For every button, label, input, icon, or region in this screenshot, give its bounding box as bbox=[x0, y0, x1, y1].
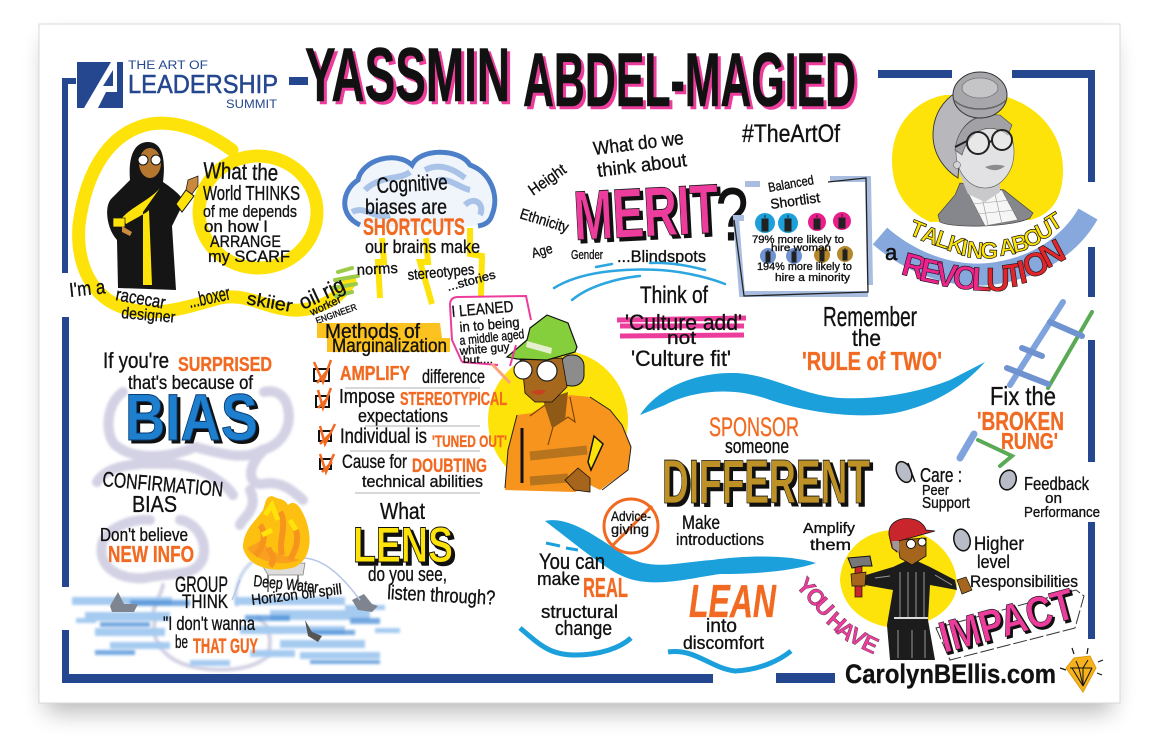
blue frame bbox=[62, 70, 1095, 683]
text: what lens: What bbox=[380, 498, 426, 524]
text: make real structural change: REAL bbox=[583, 572, 628, 603]
sponsor someone different bbox=[662, 412, 873, 520]
text: group think: be bbox=[175, 632, 188, 652]
panel: balanced shortlist: Shortlist bbox=[769, 189, 821, 212]
icon: ladder bbox=[960, 302, 1092, 466]
brain: cognitive biases: norms bbox=[356, 260, 398, 279]
text: group think: THAT GUY bbox=[193, 635, 258, 658]
icon: no advice-giving: Advice- bbox=[611, 508, 651, 524]
sponsor someone different: SPONSOR bbox=[709, 412, 799, 442]
callout: rule of two bbox=[802, 301, 942, 376]
callout: rule of two: Remember bbox=[823, 301, 917, 332]
checklist: STEREOTYPICAL bbox=[400, 389, 507, 409]
text: care peer support: Peer bbox=[922, 482, 949, 499]
panel: balanced shortlist: 194% more likely to bbox=[757, 261, 852, 273]
text: you have impact bbox=[791, 572, 1084, 665]
text: lean into discomfort: LEAN bbox=[689, 575, 777, 627]
checklist: Individual is bbox=[340, 425, 427, 448]
text: surprised bias: BIAS bbox=[128, 383, 261, 457]
text: confirmation bias: BIAS bbox=[132, 491, 177, 517]
speech: what the world thinks: ARRANGE bbox=[210, 232, 281, 251]
text: what do we think about merit: Ethnicity bbox=[518, 206, 571, 237]
text: group think: GROUP bbox=[175, 572, 228, 597]
text: what lens bbox=[353, 498, 496, 610]
panel: balanced shortlist: hire a minority bbox=[775, 272, 851, 284]
speech bubble: I leaned in: white guy bbox=[458, 340, 510, 358]
callout: fix the broken rung: 'BROKEN bbox=[977, 406, 1064, 436]
checklist: expectations bbox=[358, 406, 448, 426]
text: feedback on performance: Performance bbox=[1024, 504, 1100, 521]
text: what do we think about merit: ...Blindspots bbox=[617, 247, 706, 266]
yellow scarf swoosh bbox=[79, 123, 358, 312]
text: surprised bias: If you're bbox=[103, 348, 169, 373]
brain: cognitive biases: stereotypes bbox=[407, 261, 475, 284]
text: make introductions bbox=[676, 513, 764, 549]
callout: rule of two: 'RULE of TWO' bbox=[802, 346, 942, 376]
checklist bbox=[314, 360, 507, 493]
logo: The Art of Leadership Summit: SUMMIT bbox=[226, 97, 278, 111]
text: lean into discomfort: discomfort bbox=[683, 633, 764, 653]
icon: no advice-giving: giving bbox=[611, 521, 649, 537]
text: you have impact: IMPACT bbox=[936, 582, 1082, 665]
title: ABDEL-MAGIED bbox=[526, 41, 859, 126]
brain: cognitive biases: Cognitive bbox=[376, 169, 448, 198]
callout: rule of two: the bbox=[852, 325, 881, 351]
title: talking about a revolution bbox=[880, 207, 1088, 298]
text: care peer support bbox=[920, 465, 970, 512]
checklist: Cause for bbox=[342, 452, 408, 473]
callout: think of culture add: not bbox=[667, 328, 696, 348]
illustration: portrait of Yassmin bbox=[892, 72, 1063, 226]
callout: think of culture add: 'Culture add' bbox=[625, 310, 742, 335]
callout: fix the broken rung: Fix the bbox=[990, 381, 1056, 411]
blue river upper bbox=[640, 362, 985, 415]
checklist: 'TUNED OUT' bbox=[432, 432, 507, 451]
text: make real structural change: change bbox=[555, 618, 612, 640]
text: deep water horizon: Deep Water bbox=[253, 573, 320, 597]
title: YASSMIN bbox=[308, 36, 513, 121]
logo: The Art of Leadership Summit: THE ART OF bbox=[128, 60, 208, 72]
text: amplify them: them bbox=[810, 537, 851, 554]
text: you have impact: IMPACT bbox=[934, 580, 1080, 663]
sponsor someone different: DIFFERENT bbox=[662, 448, 870, 517]
blue strokes under blindspots bbox=[554, 263, 725, 300]
text: you have impact: YOU HAVE bbox=[791, 572, 883, 659]
text: surprised bias bbox=[103, 348, 272, 457]
panel: balanced shortlist: 79% more likely to bbox=[752, 234, 844, 246]
text: what do we think about merit: MERIT bbox=[575, 172, 724, 258]
title: talking about a revolution: a bbox=[885, 240, 898, 265]
title: talking about a revolution: TALKING ABOUT bbox=[906, 207, 1067, 264]
brain: cognitive biases: ...stories bbox=[445, 267, 497, 294]
illustration: woman in black abaya bbox=[107, 142, 198, 290]
ships bbox=[110, 592, 378, 642]
text: what lens: LENS bbox=[356, 520, 456, 576]
text: what lens: LENS bbox=[353, 517, 453, 573]
sponsor someone different: DIFFERENT bbox=[665, 451, 873, 520]
hashtag: #TheArtOf bbox=[742, 120, 840, 148]
text: confirmation bias bbox=[100, 468, 224, 567]
brain: cognitive biases: SHORTCUTS bbox=[363, 214, 465, 241]
text: career list: I'm a bbox=[68, 276, 107, 302]
text: what do we think about merit: Gender bbox=[571, 247, 603, 262]
text: make real structural change bbox=[520, 549, 631, 655]
heading: methods of marginalization: Marginalization bbox=[332, 336, 447, 357]
brain: cognitive biases: biases are bbox=[365, 196, 447, 219]
text: career list: ...boxer bbox=[186, 283, 232, 313]
sponsor someone different: someone bbox=[725, 436, 789, 458]
water: oil spill ocean bbox=[72, 597, 400, 666]
callout: fix the broken rung bbox=[977, 381, 1064, 454]
people icons bbox=[755, 212, 853, 264]
brain: cognitive biases bbox=[344, 152, 497, 304]
text: confirmation bias: CONFIRMATION bbox=[102, 468, 224, 502]
text: amplify them: Amplify bbox=[803, 520, 856, 537]
heading: methods of marginalization: Methods of bbox=[325, 321, 420, 343]
text: career list: designer bbox=[121, 305, 177, 327]
icon: no advice-giving bbox=[604, 499, 658, 553]
speech bubble: I leaned in: but.... bbox=[463, 355, 493, 366]
text: what do we think about merit: ? bbox=[716, 173, 748, 256]
text: surprised bias: SURPRISED bbox=[178, 354, 272, 376]
panel: balanced shortlist: hire woman bbox=[771, 243, 831, 254]
speech bubble: I leaned in: I LEANED bbox=[451, 299, 514, 321]
text: career list bbox=[68, 273, 359, 327]
website: CarolynBEllis.com bbox=[845, 659, 1056, 689]
text: group think: "I don't wanna bbox=[163, 614, 255, 635]
callout: think of culture add: 'Culture fit' bbox=[631, 346, 731, 371]
lightning bolts bbox=[378, 228, 482, 304]
checklist: Impose bbox=[339, 386, 395, 408]
text: what do we think about merit: Height bbox=[526, 161, 570, 199]
text: what do we think about merit: MERIT bbox=[572, 169, 721, 255]
text: deep water horizon: Horizon oil spill bbox=[250, 581, 343, 609]
text: what lens: listen through? bbox=[387, 582, 496, 610]
illustration: burning oil rig bbox=[232, 496, 360, 600]
checklist: difference bbox=[422, 367, 485, 388]
text: what do we think about merit bbox=[518, 128, 748, 266]
illustration: woman with hammer bbox=[840, 519, 972, 660]
text: higher level responsibilities: Responsibilities bbox=[970, 572, 1078, 591]
speech: what the world thinks: my SCARF bbox=[208, 247, 290, 266]
checklist: DOUBTING bbox=[412, 456, 487, 477]
text: feedback on performance bbox=[1024, 474, 1100, 521]
text: higher level responsibilities bbox=[970, 534, 1078, 591]
text: group think bbox=[163, 572, 258, 658]
text: make real structural change: You can bbox=[539, 549, 605, 574]
text: amplify them bbox=[803, 520, 856, 554]
speech: what the world thinks bbox=[203, 157, 300, 266]
text: feedback on performance: Feedback bbox=[1024, 474, 1090, 494]
text: what lens: do you see, bbox=[368, 564, 447, 586]
speech: what the world thinks: World THINKS bbox=[203, 183, 300, 205]
text: lean into discomfort: into bbox=[706, 616, 737, 637]
title: ABDEL-MAGIED bbox=[523, 38, 856, 123]
heading: methods of marginalization bbox=[317, 321, 450, 357]
callout: think of culture add bbox=[617, 282, 746, 371]
text: higher level responsibilities: level bbox=[977, 552, 1010, 572]
text: make introductions: Make bbox=[682, 513, 720, 534]
speech: what the world thinks: What the bbox=[203, 157, 279, 186]
text: career list: oil rig bbox=[295, 273, 349, 315]
text: group think: THINK bbox=[182, 592, 228, 613]
checklist: technical abilities bbox=[362, 472, 483, 491]
text: make introductions: introductions bbox=[676, 530, 764, 549]
text: lean into discomfort bbox=[668, 575, 791, 671]
checklist: AMPLIFY bbox=[340, 363, 411, 385]
icon: diamond bbox=[1060, 648, 1103, 692]
callout: fix the broken rung: RUNG' bbox=[1001, 428, 1058, 454]
speech bubble: I leaned in: a middle aged bbox=[459, 326, 525, 348]
panel: balanced shortlist: Balanced bbox=[767, 172, 815, 195]
speech: what the world thinks: of me depends bbox=[203, 202, 297, 221]
text: what do we think about merit: think about bbox=[596, 150, 689, 182]
text: confirmation bias: Don't believe bbox=[100, 525, 188, 545]
illustration: engineer in hard hat bbox=[488, 315, 631, 492]
brain: cognitive biases: our brains make bbox=[365, 237, 480, 257]
logo: The Art of Leadership Summit: LEADERSHIP bbox=[128, 69, 278, 99]
text: career list: ENGINEER bbox=[314, 302, 359, 326]
text: surprised bias: that's because of bbox=[128, 373, 254, 394]
smoke clouds bbox=[97, 391, 303, 670]
speech: what the world thinks: on how I bbox=[204, 217, 268, 236]
text: confirmation bias: NEW INFO bbox=[108, 541, 194, 567]
text: career list: racecar bbox=[114, 284, 167, 313]
text: what do we think about merit: What do we bbox=[592, 128, 685, 160]
text: care peer support: Support bbox=[922, 495, 970, 512]
icon: megaphones bbox=[893, 459, 1019, 553]
text: what do we think about merit: Age bbox=[530, 240, 554, 261]
speech bubble: I leaned in: in to being bbox=[459, 314, 520, 335]
text: higher level responsibilities: Higher bbox=[974, 534, 1025, 555]
title bbox=[289, 33, 859, 126]
text: surprised bias: BIAS bbox=[125, 380, 258, 454]
text: care peer support: Care : bbox=[920, 465, 962, 487]
blue river lower bbox=[545, 520, 816, 582]
speech bubble: I leaned in bbox=[450, 296, 531, 383]
title: YASSMIN bbox=[305, 33, 510, 118]
title: talking about a revolution: REVOLUTION bbox=[898, 231, 1071, 298]
text: career list: skiier bbox=[245, 288, 294, 316]
logo: The Art of Leadership Summit bbox=[77, 60, 278, 111]
callout: think of culture add: Think of bbox=[640, 282, 708, 309]
text: make real structural change: make bbox=[537, 569, 580, 589]
panel: balanced shortlist bbox=[734, 172, 870, 296]
text: feedback on performance: on bbox=[1045, 490, 1062, 507]
text: career list: worker bbox=[307, 294, 343, 319]
text: make real structural change: structural bbox=[541, 602, 618, 622]
